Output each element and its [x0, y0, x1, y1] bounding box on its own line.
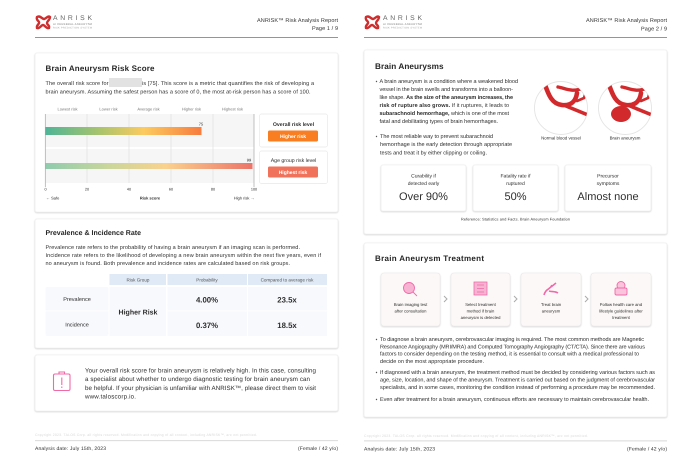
logo: ANRISK [53, 15, 92, 22]
logo: RISK PREDICTION SYSTEM [53, 26, 92, 30]
bar chart: 0 [44, 188, 47, 192]
risk table: 23.5x [277, 296, 297, 304]
bar chart: Average risk [137, 106, 160, 112]
panel: brain aneurysm treatment [364, 243, 667, 417]
risk table: Prevalence [63, 297, 91, 303]
step 4: lifestyle guidelines after [599, 308, 643, 314]
explanation bullets [376, 79, 518, 156]
panel: prevalence and incidence rate [35, 219, 338, 348]
explanation bullets: hemorrhage is the early detection through appropriate [380, 142, 512, 148]
page 2 header [364, 15, 667, 38]
logo [366, 15, 423, 30]
arrow [585, 296, 588, 302]
illustration: brain aneurysm: Brain aneurysm [610, 136, 641, 140]
logo: AI CEREBRAL ANEURYSM [53, 22, 93, 26]
panel: brain aneurysms [364, 50, 667, 234]
explanation bullets: fatal and debilitating types of brain hemorrhages. [380, 119, 498, 125]
stat card: precursor symptoms [565, 165, 651, 211]
stat card: fatality: Fatality rate if [500, 174, 531, 180]
icon: health care [615, 282, 627, 295]
step 4: treatment [612, 315, 631, 320]
step 1 [381, 273, 440, 326]
stat card: precursor symptoms: Almost none [577, 191, 639, 203]
bar chart: Higher risk [182, 106, 201, 112]
explanation bullets: like shape. As the size of the aneurysm increases, the [380, 95, 513, 101]
heading: Brain Aneurysms [375, 62, 444, 71]
risk table: Higher Risk [119, 308, 158, 316]
stat card: curability: Over 90% [399, 191, 448, 203]
description: is [75]. This score is a metric that quantifies the risk of developing a [142, 81, 315, 87]
bar chart: 60 [169, 188, 173, 192]
recommendation text: be helpful. If your physician is unfamiliar with ANRISK™, please direct them to visit [85, 385, 316, 392]
bar chart: 100 [251, 188, 257, 192]
logo [37, 15, 93, 30]
stat card: fatality: 50% [504, 191, 527, 203]
panel: brain aneurysm risk score [35, 53, 338, 212]
risk table [46, 274, 327, 336]
page 2 footer: Analysis date: July 15th, 2023 [364, 446, 435, 452]
age group risk level box: Age group risk level [271, 158, 316, 164]
explanation bullets: A brain aneurysm is a condition where a weakened blood [380, 79, 518, 85]
stat card: curability: detected early [408, 181, 440, 187]
description: Incidence rate refers to the likelihood of developing a new brain aneurysm within the next five years, even if [46, 253, 321, 259]
risk table: Probability [196, 277, 218, 282]
heading: Brain Aneurysm Risk Score [46, 64, 155, 73]
description: brain aneurysm. Assuming the safest person has a score of 0, the most at-risk person has a score of 100. [46, 90, 311, 96]
recommendation text: a specialist about whether to undergo diagnostic testing for brain aneurysm can [85, 376, 311, 383]
reference note: Reference: Statistics and Facts. Brain Aneurysm Foundation [461, 218, 570, 222]
step 3: Treat brain [541, 302, 562, 307]
stat card: fatality: ruptured [506, 181, 525, 187]
bar chart: Risk score [140, 196, 161, 200]
page 1 footer: Copyright 2023. TALOS Corp. all rights reserved. Modification and copying of all content, including ANRISK™, are not permitted. [35, 433, 257, 437]
overall risk level box: Overall risk level [273, 122, 315, 128]
step 2: aneurysm is detected [461, 315, 501, 320]
stat card: precursor symptoms: Precursor [597, 174, 619, 180]
page 2 header: Page 2 / 9 [641, 26, 667, 32]
bar chart: 80 [211, 188, 215, 192]
explanation bullets: tests and treat it by either clipping or coiling. [380, 150, 487, 156]
page 2 footer: Copyright 2023. TALOS Corp. all rights reserved. Modification and copying of all content, including ANRISK™, are not permitted. [364, 434, 588, 438]
recommendation text [84, 368, 317, 400]
page 1 footer: Analysis date: July 15th, 2023 [35, 446, 106, 452]
illustration: normal blood vessel: Normal blood vessel [541, 136, 581, 140]
bar chart: 20 [85, 188, 89, 192]
risk table: 18.5x [277, 321, 297, 330]
description: The overall risk score for [46, 81, 109, 87]
overall risk level box [260, 114, 328, 147]
bar chart: High risk → [234, 196, 254, 200]
bar chart: ← Safe [46, 196, 60, 200]
arrow [514, 296, 517, 302]
stat card: curability: Curability if [411, 174, 436, 180]
age group risk level box [260, 151, 328, 184]
heading: Brain Aneurysm Treatment [375, 254, 484, 263]
step 1: Brain imaging test [394, 302, 428, 307]
treatment bullets: factors to consider depending on the testing method, it is essential to consult with a medical professional to [380, 352, 639, 358]
explanation bullets: vessel in the brain swells and transforms into a balloon- [380, 87, 513, 93]
description: Prevalence rate refers to the probability of having a brain aneurysm if an imaging scan is performed. [46, 245, 300, 251]
description: no aneurysm is found. Both prevalence and incidence rates are calculated based on risk groups. [46, 261, 290, 267]
panel: recommendation callout [35, 355, 338, 411]
illustration: normal blood vessel [534, 82, 588, 140]
explanation bullets: subarachnoid hemorrhage, which is one of the most [380, 111, 509, 117]
stat card: fatality [473, 165, 558, 211]
step 2: method if brain [467, 308, 495, 314]
illustration: brain aneurysm [598, 82, 652, 140]
explanation bullets: risk of rupture also grows. If it ruptures, it leads to [380, 103, 509, 109]
risk table: 4.00% [196, 296, 218, 304]
step 3: aneurysm [542, 308, 561, 314]
bar chart: 40 [127, 188, 131, 192]
step 2: Select treatment [465, 302, 497, 307]
step 4: Follow health care and [600, 302, 643, 307]
overall risk level box: Higher risk [280, 134, 306, 140]
arrow [444, 296, 447, 302]
step 2 [451, 273, 510, 326]
risk table: Compared to average risk [261, 277, 314, 282]
icon: brain scan [474, 282, 487, 295]
page 1 footer [35, 433, 338, 452]
page 1 footer: (Female / 42 y/o) [298, 446, 338, 452]
page 1 header [35, 15, 338, 38]
step 4 [591, 273, 651, 326]
age group risk level box: Highest risk [279, 170, 308, 176]
report title: ANRISK™ Risk Analysis Report [257, 18, 338, 24]
icon: treated vessel [544, 283, 558, 295]
treatment bullets: Even after treatment for a brain aneurysm, continuous efforts are necessary to maintain cerebrovascular health. [380, 397, 649, 403]
logo: ANRISK [383, 15, 422, 22]
logo: AI CEREBRAL ANEURYSM [383, 22, 423, 26]
risk table: Incidence [65, 322, 89, 328]
logo: RISK PREDICTION SYSTEM [383, 26, 422, 30]
page 2 footer [364, 434, 667, 452]
bar chart: Highest risk [222, 106, 243, 112]
treatment bullets: specialists, and in some cases, monitoring the condition instead of performing a procedure may be recommended. [380, 385, 655, 391]
page 1 header: Page 1 / 9 [312, 26, 338, 32]
icon: magnifier [404, 282, 417, 296]
bar chart: 75 [199, 122, 204, 126]
heading: Prevalence & Incidence Rate [46, 229, 141, 237]
recommendation text: www.taloscorp.io. [84, 394, 136, 400]
bar chart: Lower risk [99, 106, 118, 112]
treatment bullets: To diagnose a brain aneurysm, cerebrovascular imaging is required. The most common methods are Magnetic [380, 337, 644, 343]
treatment bullets [376, 337, 655, 403]
stat card: curability [381, 165, 466, 211]
risk table: Risk Group [127, 277, 150, 282]
treatment bullets: If diagnosed with a brain aneurysm, the treatment method must be decided by considering various factors such as [380, 370, 655, 376]
page 2 footer: (Female / 42 y/o) [627, 446, 667, 452]
treatment bullets: age, size, location, and shape of the aneurysm. Treatment is carried out based on the judgment of cerebrovascular [380, 378, 655, 384]
report title: ANRISK™ Risk Analysis Report [586, 18, 667, 24]
icon: alert clipboard [54, 372, 70, 390]
stat card: precursor symptoms: symptoms [597, 181, 620, 187]
step 3 [521, 273, 581, 326]
bar chart: Lowest risk [57, 106, 78, 112]
treatment bullets: decide on the most appropriate procedure. [380, 359, 484, 365]
risk table: 0.37% [196, 321, 218, 330]
treatment bullets: Resonance Angiography (MRI/MRA) and Computed Tomography Angiography (CT/CTA). Since there are various [380, 344, 645, 350]
explanation bullets: The most reliable way to prevent subarachnoid [380, 134, 493, 140]
bar chart [44, 106, 257, 200]
recommendation text: Your overall risk score for brain aneurysm is relatively high. In this case, consulting [85, 368, 317, 374]
step 1: after consultation [395, 308, 427, 314]
bar chart: 99 [247, 158, 252, 162]
description [46, 245, 321, 267]
description [46, 78, 315, 96]
